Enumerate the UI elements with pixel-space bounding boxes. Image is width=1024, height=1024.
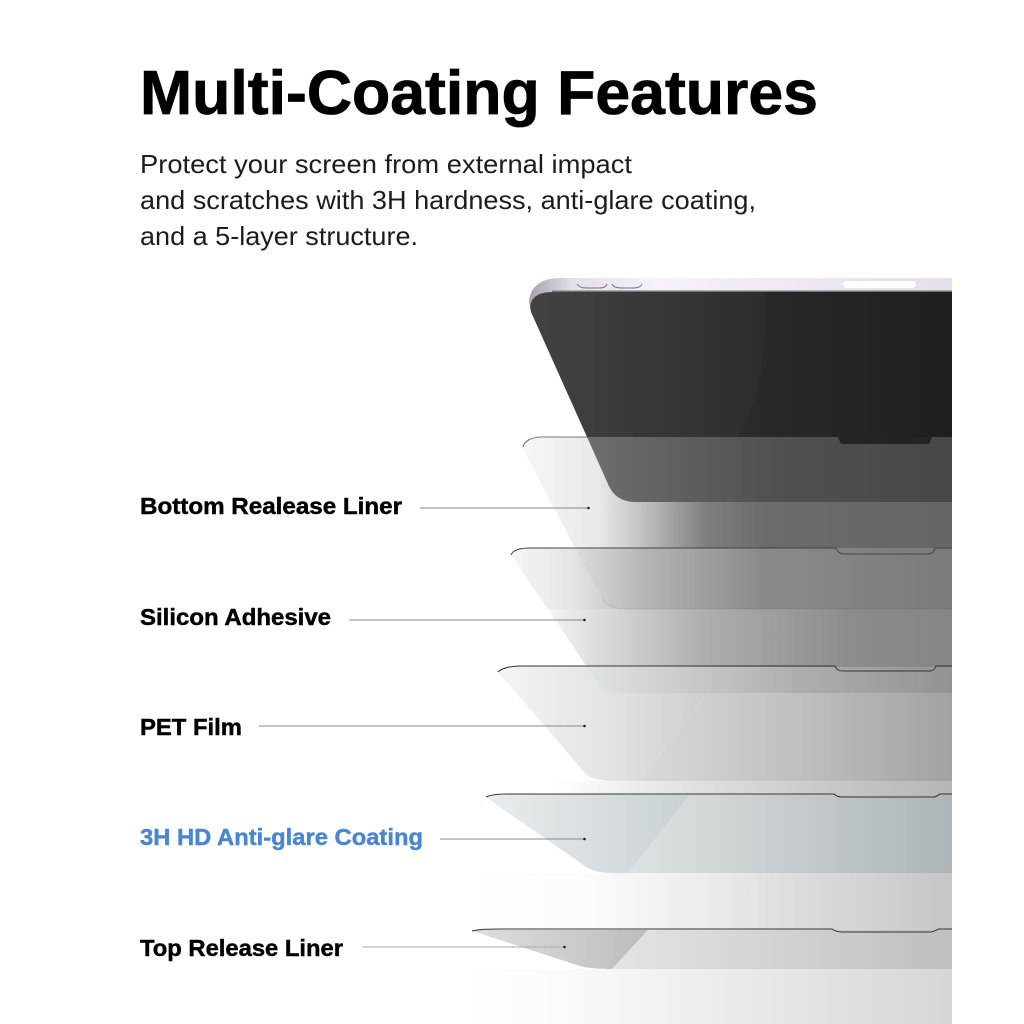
layer 3: PET film — [498, 666, 952, 781]
intro text: Protect your screen from external impact — [140, 149, 633, 179]
label: PET film: PET Film — [140, 714, 242, 740]
layer 4: anti-glare coating — [486, 794, 952, 873]
rim lower edge — [552, 290, 952, 292]
screen reflection — [530, 292, 766, 437]
layer 5: top release liner — [472, 929, 952, 969]
label: top release liner: Top Release Liner — [140, 935, 343, 961]
intro text: and scratches with 3H hardness, anti-glare coating, — [140, 185, 756, 215]
title: Multi-Coating Features — [140, 59, 818, 128]
label: bottom release liner: Bottom Realease Liner — [140, 493, 402, 519]
label: silicon adhesive: Silicon Adhesive — [140, 604, 331, 630]
soft shadow behind layers — [470, 781, 952, 1024]
tablet screen — [530, 292, 952, 437]
intro text — [140, 149, 756, 251]
tablet buttons — [577, 284, 642, 288]
tablet metal rim — [529, 278, 952, 312]
layer 1: bottom release liner — [523, 437, 952, 548]
label: 3H HD anti-glare coating: 3H HD Anti-glare Coating — [140, 824, 423, 850]
screen through first layer — [587, 437, 952, 502]
layer 2: silicon adhesive — [511, 548, 952, 667]
intro text: and a 5-layer structure. — [140, 221, 418, 251]
tablet device — [529, 278, 952, 502]
dark notch — [838, 437, 932, 444]
tablet pill highlight — [843, 281, 916, 288]
